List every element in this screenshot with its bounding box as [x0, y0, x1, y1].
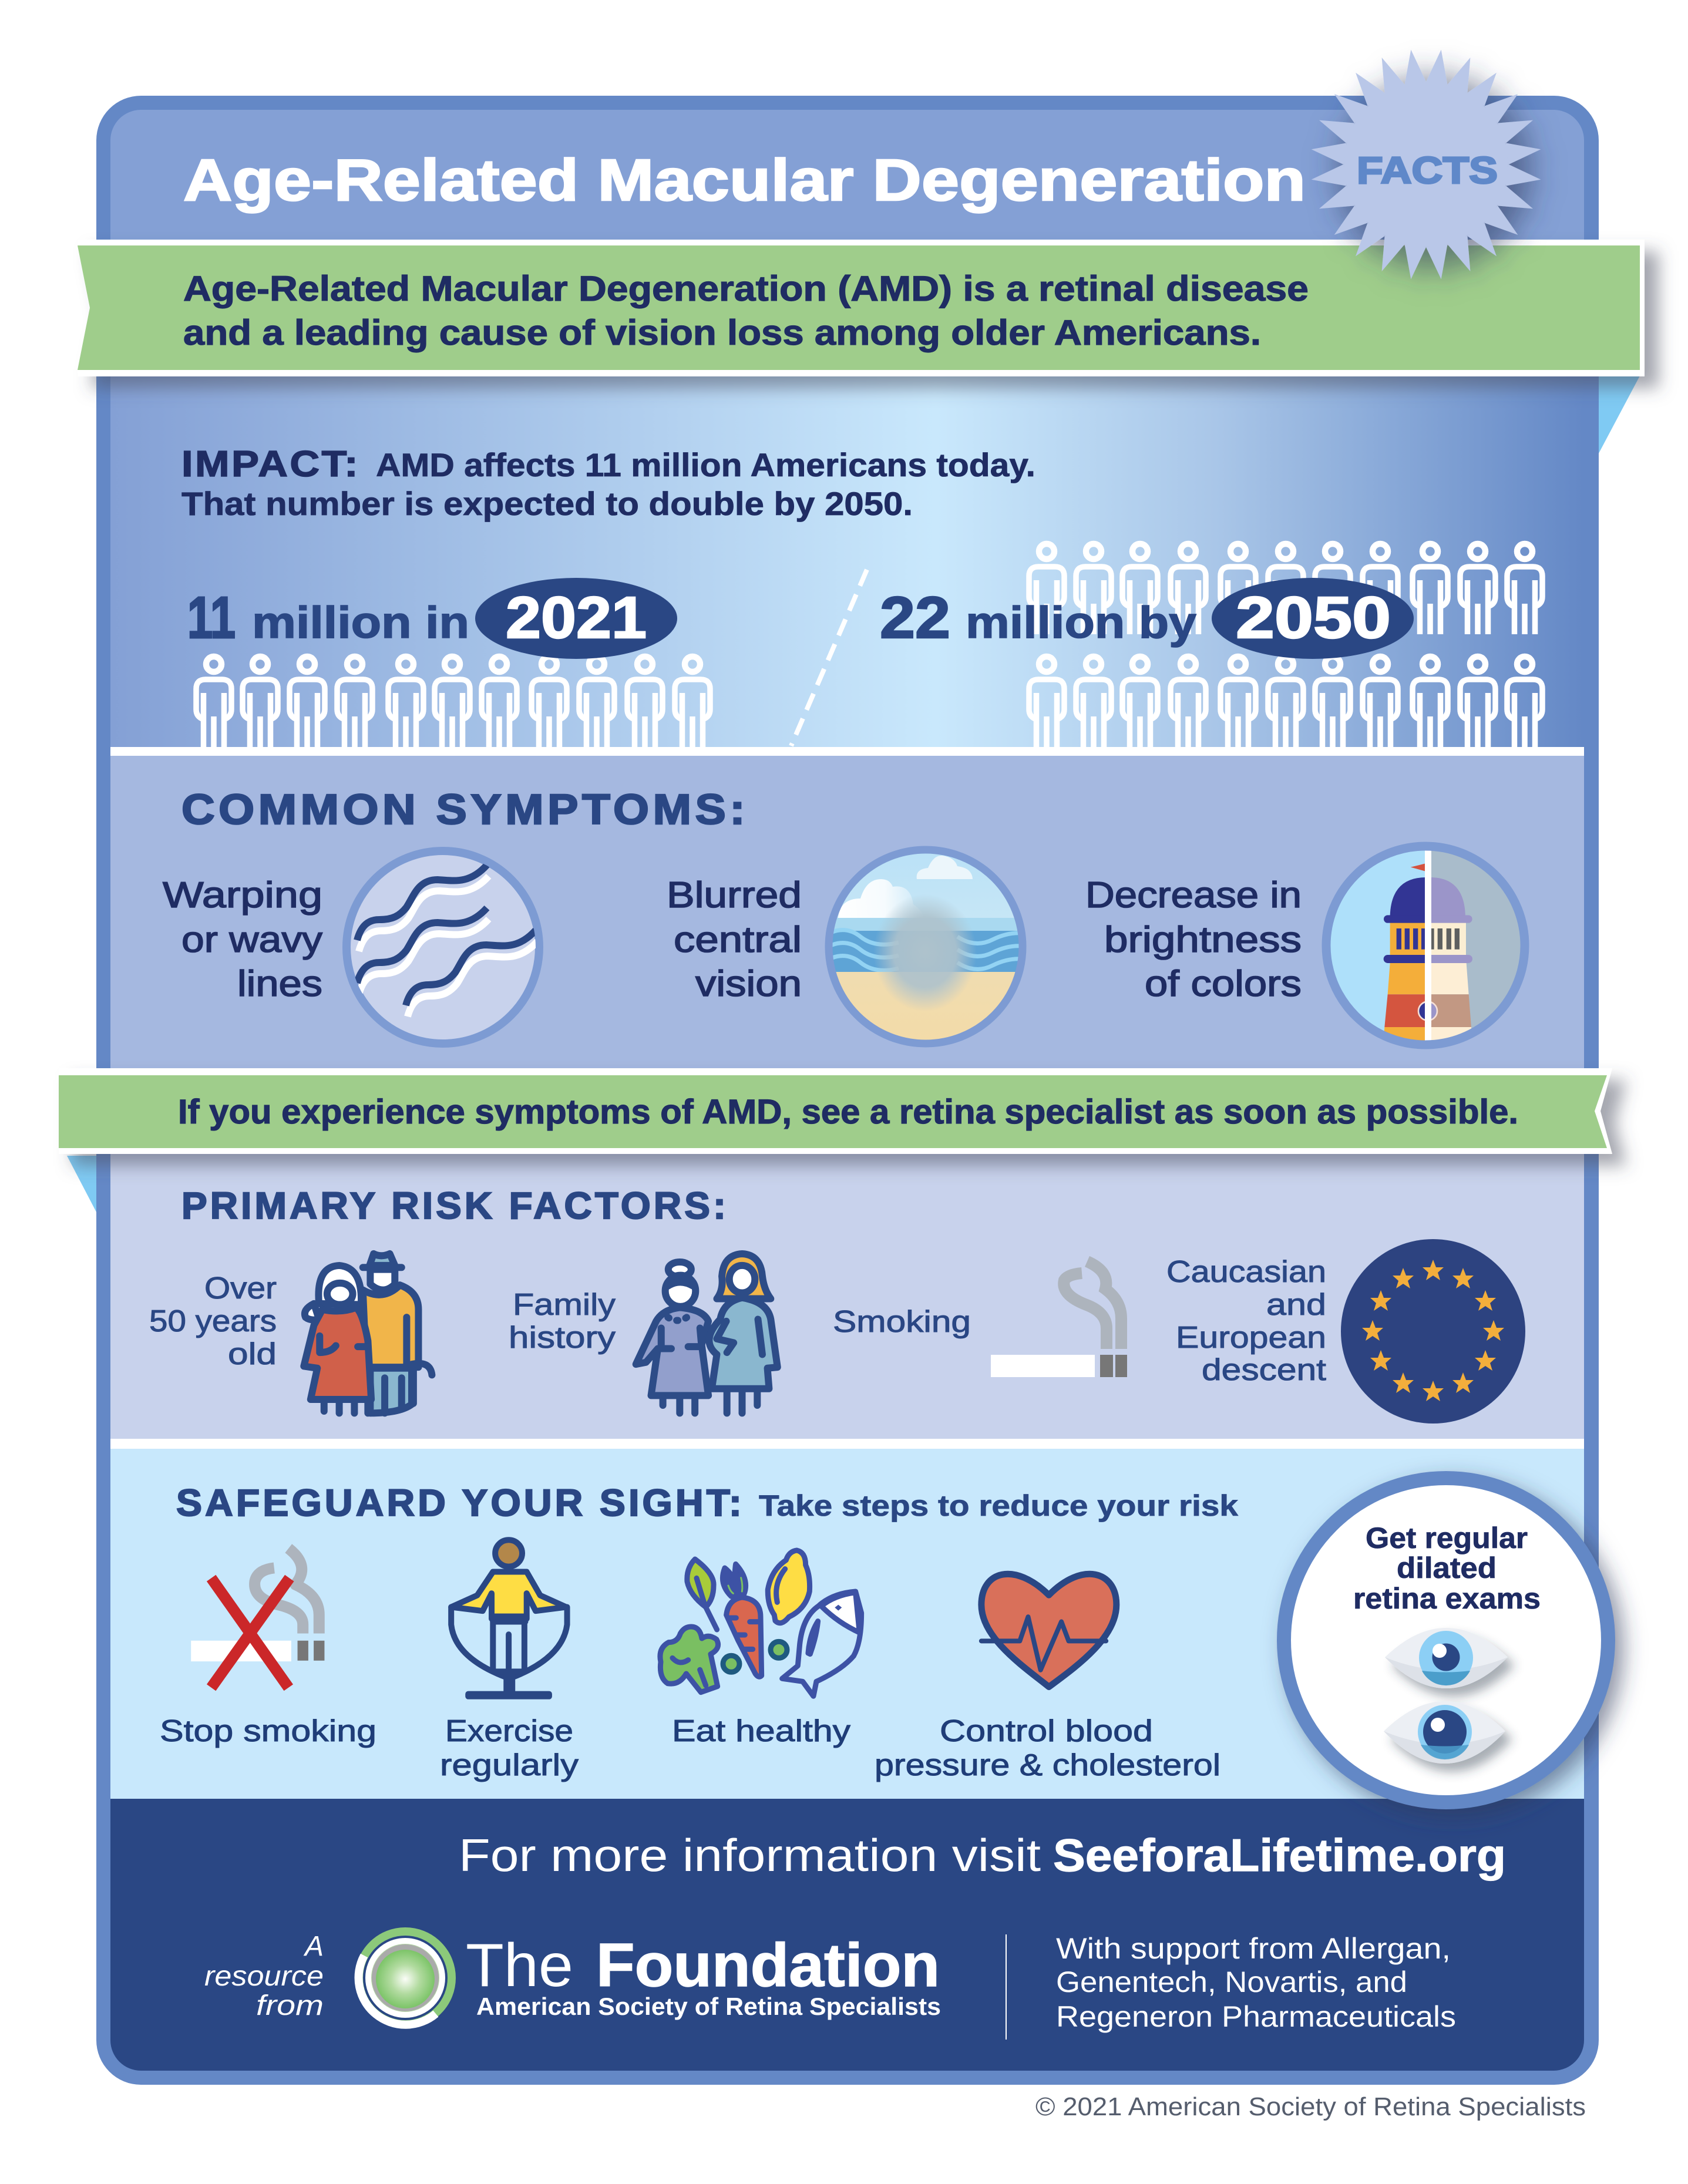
risk text: age: Over	[204, 1271, 277, 1305]
footer: sponsors: With support from Allergan,	[1056, 1932, 1451, 1965]
panel: colored sections	[110, 110, 1584, 2075]
icon: lighthouse split	[1326, 846, 1527, 1045]
impact text	[181, 444, 1035, 522]
symptom text: brightness: Decrease in	[1085, 875, 1302, 916]
risk text: smoking: Smoking	[833, 1305, 971, 1339]
heading: safeguard your sight	[176, 1482, 1238, 1524]
symptom text: warping: Warping	[163, 875, 322, 916]
stat: 11 million in 2021	[187, 578, 677, 659]
impact text: IMPACT:	[181, 444, 360, 484]
icon: wavy lines	[347, 851, 539, 1044]
ribbon fold: lower left	[67, 1156, 96, 1212]
ribbon fold: top right	[1599, 376, 1640, 453]
stat: 22 million by 2050: million by	[966, 598, 1196, 648]
heading: primary risk factors: PRIMARY RISK FACTORS:	[181, 1184, 729, 1227]
footer: sponsors	[1056, 1932, 1456, 2033]
footer: sponsors: Regeneron Pharmaceuticals	[1056, 2000, 1456, 2033]
callout: eye exams	[1284, 1478, 1608, 1802]
risk text: ancestry: European	[1176, 1321, 1326, 1355]
risk text: ancestry: descent	[1202, 1353, 1327, 1387]
pictogram: 11 million people	[196, 657, 710, 747]
badge label: FACTS	[1357, 149, 1498, 191]
risk text: ancestry	[1166, 1255, 1327, 1387]
ribbon: definition	[78, 240, 1645, 376]
copyright: © 2021 American Society of Retina Specialists	[1035, 2092, 1586, 2121]
icon: heart with pulse	[981, 1574, 1117, 1687]
callout text: retina exams	[1353, 1582, 1541, 1615]
stat: 11 million in 2021: 11	[187, 585, 236, 651]
footer: resource from	[204, 1931, 324, 2021]
symptom text: blurred: Blurred	[667, 875, 802, 916]
logo wordmark: The	[466, 1931, 573, 2000]
icon: eye one	[1385, 1628, 1508, 1688]
captions: safeguard actions: Control blood	[940, 1714, 1153, 1748]
logo wordmark	[466, 1931, 941, 2020]
icon: eye two	[1384, 1701, 1505, 1764]
footer: more information: SeeforaLifetime.org	[1053, 1829, 1506, 1881]
symptom text: brightness	[1085, 875, 1302, 1004]
risk text: age: old	[228, 1337, 277, 1371]
divider: dashed line	[791, 570, 867, 746]
footer: sponsors: Genentech, Novartis, and	[1056, 1966, 1407, 1998]
icon: jump rope	[451, 1540, 567, 1697]
symptom text: brightness: brightness	[1104, 920, 1302, 960]
icon: family women	[636, 1254, 778, 1413]
risk text: age	[149, 1271, 277, 1371]
ribbon text: Age-Related Macular Degeneration (AMD) is a retinal disease	[183, 269, 1309, 308]
symptom text: blurred: central	[674, 920, 802, 960]
callout text	[1353, 1522, 1541, 1615]
stat: 22 million by 2050: 22	[880, 585, 950, 651]
heading: safeguard your sight: SAFEGUARD YOUR SIGHT:	[176, 1482, 745, 1524]
risk text: family: history	[509, 1321, 616, 1355]
impact text: That number is expected to double by 2050.	[181, 485, 913, 522]
stat: 11 million in 2021: 2021	[506, 585, 647, 651]
logo wordmark: Foundation	[596, 1931, 940, 2000]
ribbon: call to action	[59, 1068, 1612, 1154]
captions: safeguard actions: Exercise	[445, 1714, 573, 1748]
captions: safeguard actions: regularly	[440, 1748, 579, 1782]
icon: blurred beach	[828, 846, 1028, 1044]
ribbon text	[183, 269, 1309, 352]
heading: common symptoms: COMMON SYMPTOMS:	[181, 786, 749, 833]
symptom text: warping: lines	[237, 964, 322, 1004]
callout text: Get regular	[1366, 1522, 1528, 1554]
footer: more information	[459, 1829, 1506, 1881]
icon: european flag circle	[1341, 1239, 1525, 1424]
impact text: AMD affects 11 million Americans today.	[376, 446, 1035, 483]
footer: more information: For more information visit	[459, 1829, 1041, 1881]
logo: green orb	[359, 1931, 452, 2025]
callout text: dilated	[1397, 1552, 1497, 1584]
icon: older couple	[304, 1254, 432, 1413]
captions: safeguard actions: Eat healthy	[672, 1714, 850, 1748]
badge: facts starburst	[1310, 48, 1542, 281]
footer: resource from: A	[303, 1931, 324, 1962]
risk text: family: Family	[513, 1288, 616, 1322]
stat: 22 million by 2050	[880, 578, 1414, 659]
captions: safeguard actions: pressure & cholesterol	[875, 1748, 1220, 1782]
symptom text: blurred: vision	[695, 964, 802, 1004]
symptom text: warping	[163, 875, 322, 1004]
icon: no smoking	[191, 1549, 324, 1688]
stat: 22 million by 2050: 2050	[1236, 585, 1391, 651]
icon: cigarette	[991, 1261, 1127, 1377]
footer: resource from: resource	[204, 1961, 324, 1992]
risk text: age: 50 years	[149, 1304, 277, 1338]
ribbon text: If you experience symptoms of AMD, see a retina specialist as soon as possible.	[178, 1093, 1518, 1131]
risk text: ancestry: Caucasian	[1166, 1255, 1326, 1289]
stat: 11 million in 2021: million in	[252, 598, 469, 648]
footer: resource from: from	[256, 1990, 324, 2021]
risk text: family	[509, 1288, 616, 1355]
icon: healthy food	[660, 1550, 862, 1696]
logo wordmark: American Society of Retina Specialists	[476, 1993, 941, 2020]
heading: safeguard your sight: Take steps to reduce your risk	[759, 1489, 1238, 1522]
symptom text: blurred	[667, 875, 802, 1004]
captions: safeguard actions: Stop smoking	[160, 1714, 376, 1748]
symptom text: brightness: of colors	[1145, 964, 1302, 1004]
symptom text: warping: or wavy	[181, 920, 322, 960]
ribbon text: and a leading cause of vision loss among older Americans.	[183, 313, 1261, 352]
captions: safeguard actions	[160, 1714, 1220, 1782]
pictogram: 22 million people	[1029, 544, 1542, 747]
risk text: ancestry: and	[1266, 1288, 1326, 1322]
title: Age-Related Macular Degeneration	[183, 147, 1306, 213]
